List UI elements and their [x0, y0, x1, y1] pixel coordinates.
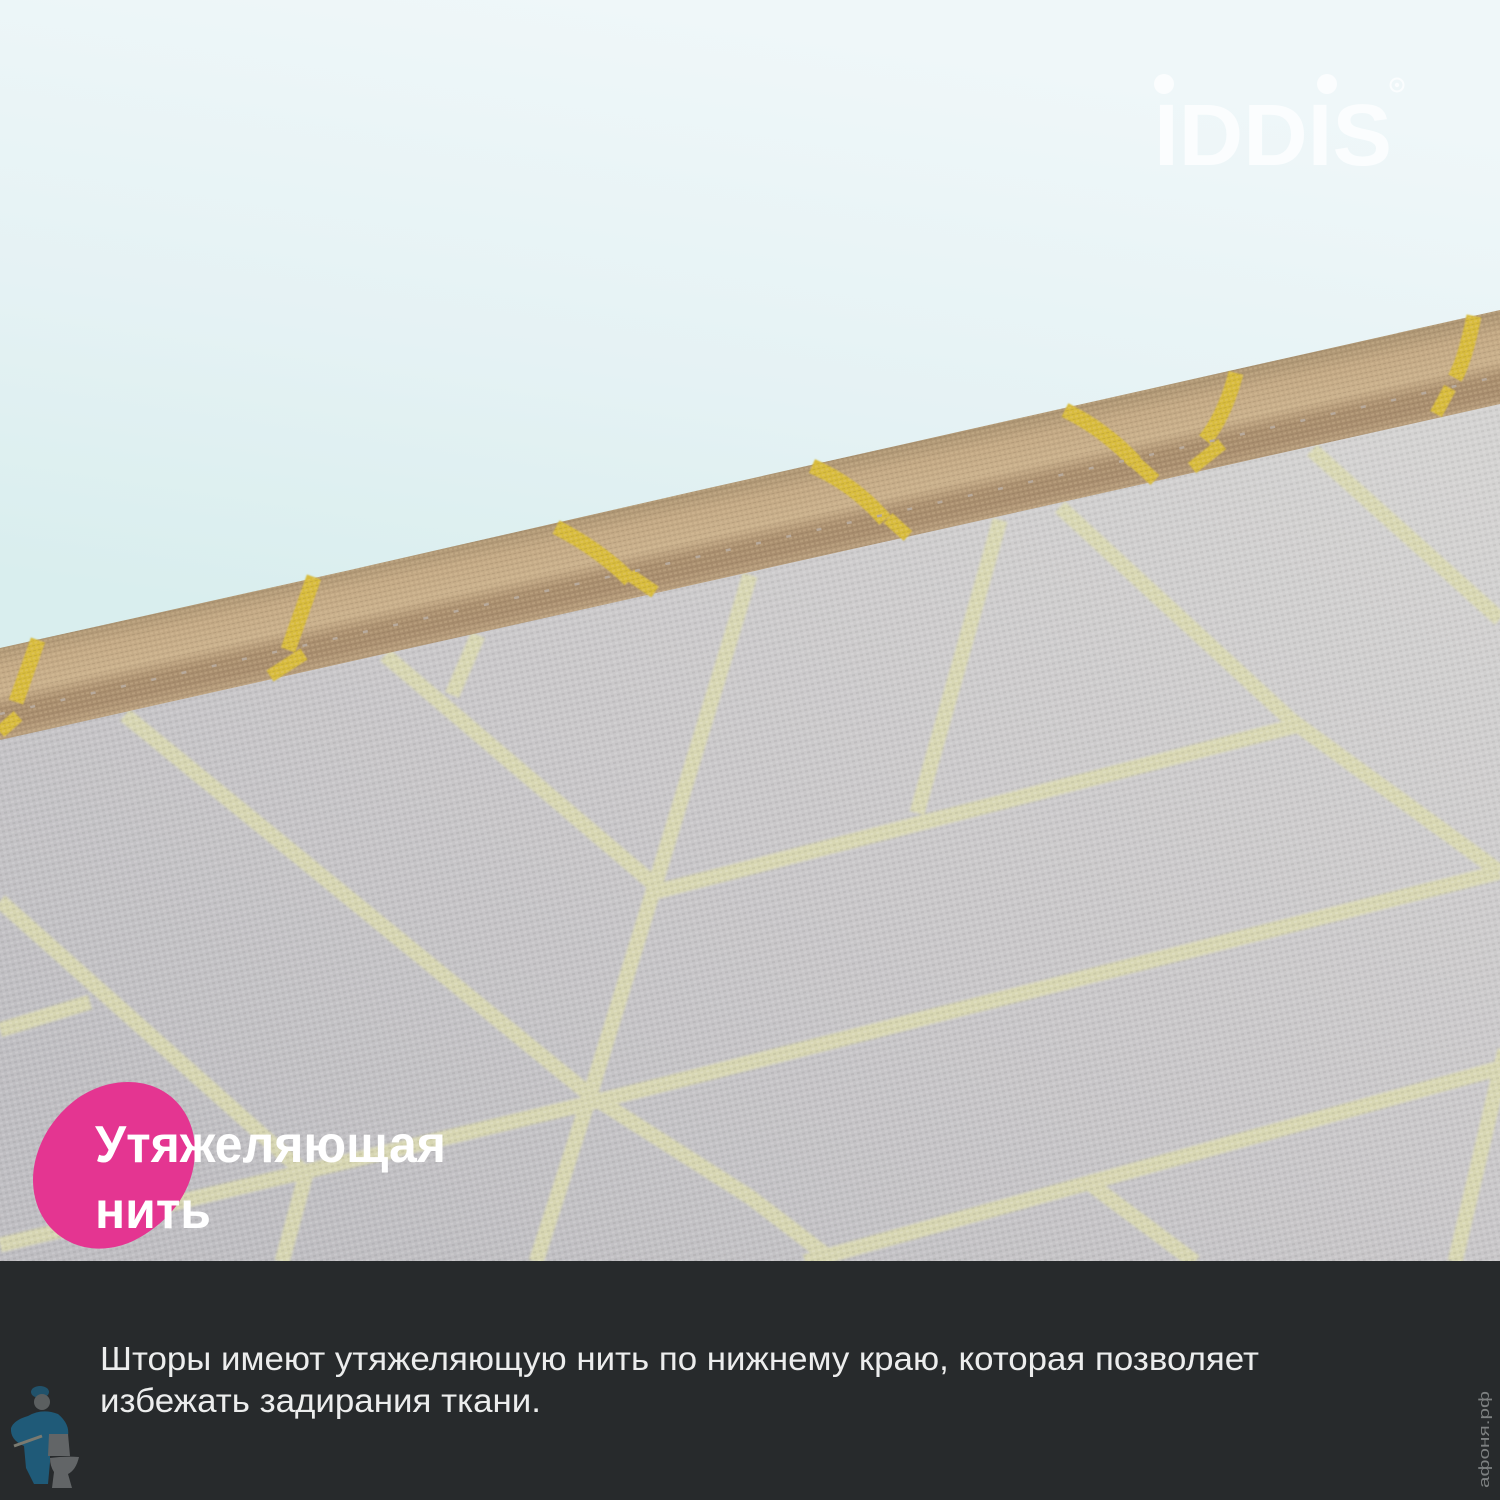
body text: избежать задирания ткани.	[100, 1382, 541, 1419]
background: pale blue wall	[0, 0, 1500, 760]
body text: Шторы имеют утяжеляющую нить по нижнему краю, которая позволяет	[100, 1340, 1259, 1377]
icon: plumber with toilet	[11, 1386, 79, 1488]
heading	[95, 1116, 446, 1240]
hem stitch line	[0, 376, 1500, 714]
hem: weighted cord edge	[0, 310, 1500, 740]
printed yellow lines	[0, 450, 1500, 1262]
pink blob	[33, 1082, 195, 1249]
heading: нить	[95, 1182, 211, 1240]
body text	[100, 1340, 1259, 1419]
logo: IDDIS: IDDIS	[1154, 87, 1392, 184]
fabric panel with geometric yellow print	[0, 400, 1500, 1262]
hem yellow stripes	[0, 316, 1474, 732]
watermark: afonya.rf: афоня.рф	[1476, 1391, 1493, 1488]
dark footer panel	[0, 1261, 1500, 1500]
heading: Утяжеляющая	[95, 1116, 446, 1174]
